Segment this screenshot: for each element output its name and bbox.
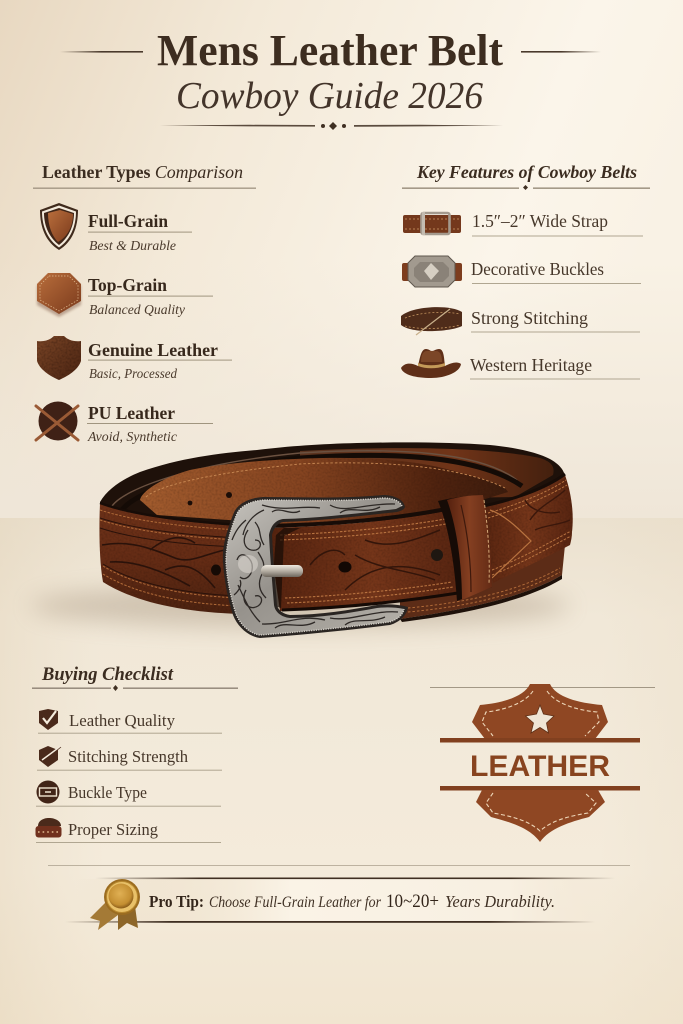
icon: coiled belt (36, 818, 62, 838)
item: buckle type: Buckle Type (68, 783, 147, 802)
text: strong stitching: Strong Stitching (471, 308, 588, 328)
text: top-grain: Top-Grain (88, 275, 167, 295)
badge lower patch (476, 790, 605, 842)
badge wordmark: LEATHER (470, 750, 610, 783)
title ornament divider (160, 122, 503, 130)
badge top bar (440, 738, 640, 742)
badge bottom bar (440, 786, 640, 790)
text: wide strap: 1.5″–2″ Wide Strap (472, 211, 608, 231)
text: pu leather: Avoid, Synthetic (87, 430, 178, 445)
item: leather quality (38, 709, 222, 734)
heading: buying checklist: Buying Checklist (41, 664, 174, 685)
panel: leather types (33, 162, 256, 445)
icon: decorative buckle (402, 256, 462, 287)
panel: buying checklist (32, 664, 238, 843)
text: top-grain: Balanced Quality (89, 303, 186, 318)
text: genuine leather: Genuine Leather (88, 340, 218, 360)
icon: pu leather crossed (36, 402, 78, 440)
pro tip banner: Years Durability. (445, 892, 555, 911)
belt left strap (99, 503, 240, 614)
badge star (526, 705, 554, 733)
item: proper sizing (36, 818, 221, 843)
title main line: Mens Leather Belt (157, 26, 503, 75)
text: pu leather (87, 403, 213, 445)
text: pro tip: Pro Tip: (149, 892, 204, 911)
badge lower stitching (486, 793, 596, 831)
badge upper stitching (482, 691, 599, 736)
text: full-grain (88, 211, 192, 254)
belt illustration (30, 442, 573, 638)
icon: shield check (39, 709, 58, 730)
buckle pin (261, 565, 303, 577)
panel: key features (401, 162, 650, 380)
text: full-grain: Best & Durable (89, 239, 176, 254)
icon: round buckle (36, 780, 60, 804)
icon: full-grain shield (40, 203, 78, 250)
heading: leather types comparison: Leather Types Comparison (42, 162, 243, 182)
leather badge (430, 684, 655, 842)
belt keeper loop (438, 495, 492, 601)
icon: needle shield (39, 746, 61, 767)
belt back coil (100, 442, 566, 535)
icon: stitched belt (401, 307, 462, 335)
belt lower band (400, 545, 565, 622)
item: proper sizing: Proper Sizing (68, 820, 158, 839)
icon: wide strap (403, 212, 461, 235)
text: genuine leather (88, 340, 232, 382)
item: stitching strength: Stitching Strength (68, 747, 188, 766)
icon: gold medal (90, 879, 140, 930)
item: buckle type (36, 780, 221, 807)
pro tip banner: 10~20+ (386, 891, 439, 912)
belt shadow (30, 584, 570, 628)
belt right strap (478, 474, 573, 583)
item: leather quality: Leather Quality (69, 711, 175, 730)
heading: key features of cowboy belts: Key Features of Cowboy Belts (416, 162, 637, 182)
icon: genuine leather patch (37, 336, 81, 380)
belt centre strap (268, 509, 458, 611)
text: pu leather: PU Leather (88, 403, 175, 423)
text: western heritage: Western Heritage (470, 355, 592, 375)
pro tip banner: Choose Full-Grain Leather for (209, 894, 382, 911)
badge upper patch (472, 684, 608, 739)
icon: cowboy hat (401, 349, 461, 378)
text: decorative buckles: Decorative Buckles (471, 259, 604, 279)
text: full-grain: Full-Grain (88, 211, 168, 231)
text: genuine leather: Basic, Processed (89, 367, 178, 382)
pro tip banner (48, 865, 630, 930)
icon: top-grain patch (37, 273, 81, 317)
subtitle: Cowboy Guide 2026 (176, 75, 483, 117)
belt buckle (223, 495, 408, 638)
item: stitching strength (37, 746, 222, 771)
text: top-grain (88, 275, 213, 318)
